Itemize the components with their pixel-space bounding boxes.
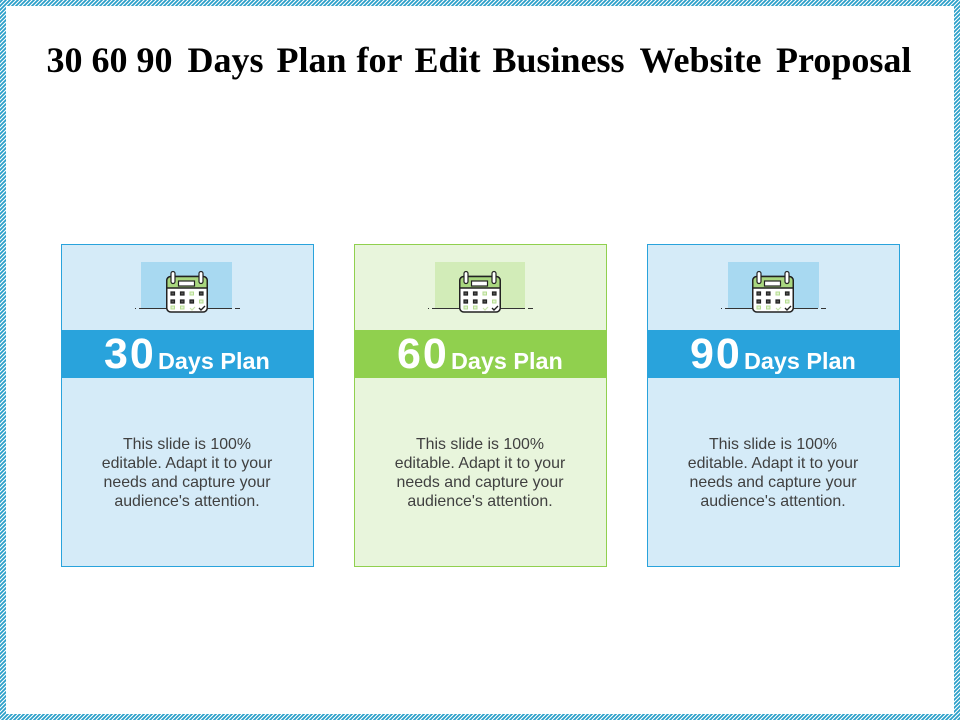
body text: audience's attention. xyxy=(407,493,553,510)
body text xyxy=(102,436,272,510)
heading band: 30 xyxy=(104,330,156,378)
body text: This slide is 100% xyxy=(416,436,544,453)
body text xyxy=(688,436,858,510)
heading band: 60 xyxy=(397,330,449,378)
icon backdrop xyxy=(435,262,525,308)
title: 30 60 90 xyxy=(46,40,172,80)
heading band: Days Plan xyxy=(744,348,856,374)
icon backdrop xyxy=(728,262,819,308)
body text: editable. Adapt it to your xyxy=(395,455,565,472)
body text: audience's attention. xyxy=(114,493,260,510)
icon: calendar xyxy=(135,270,240,313)
body text: This slide is 100% xyxy=(123,436,251,453)
title: Website xyxy=(640,40,762,80)
title xyxy=(46,40,911,80)
body text: needs and capture your xyxy=(104,474,270,491)
title: Business xyxy=(492,40,625,80)
body text: needs and capture your xyxy=(397,474,563,491)
heading band: Days Plan xyxy=(158,348,270,374)
body text xyxy=(395,436,566,510)
body text: This slide is 100% xyxy=(709,436,837,453)
title: for xyxy=(356,40,402,80)
icon backdrop xyxy=(141,262,232,308)
panel: 30 days plan xyxy=(61,244,314,567)
heading band: Days Plan xyxy=(451,348,563,374)
title: Days xyxy=(188,40,264,80)
heading band xyxy=(354,330,607,378)
title: Proposal xyxy=(776,40,911,80)
panel: 90 days plan xyxy=(647,244,900,567)
body text: needs and capture your xyxy=(690,474,856,491)
body text: audience's attention. xyxy=(700,493,846,510)
body text: editable. Adapt it to your xyxy=(102,455,272,472)
title: Plan xyxy=(276,40,347,80)
title: Edit xyxy=(414,40,481,80)
panel: 60 days plan xyxy=(354,244,607,567)
heading band xyxy=(61,330,314,378)
heading band xyxy=(647,330,900,378)
icon: calendar xyxy=(721,270,826,313)
heading band: 90 xyxy=(690,330,742,378)
icon: calendar xyxy=(428,270,533,313)
body text: editable. Adapt it to your xyxy=(688,455,858,472)
